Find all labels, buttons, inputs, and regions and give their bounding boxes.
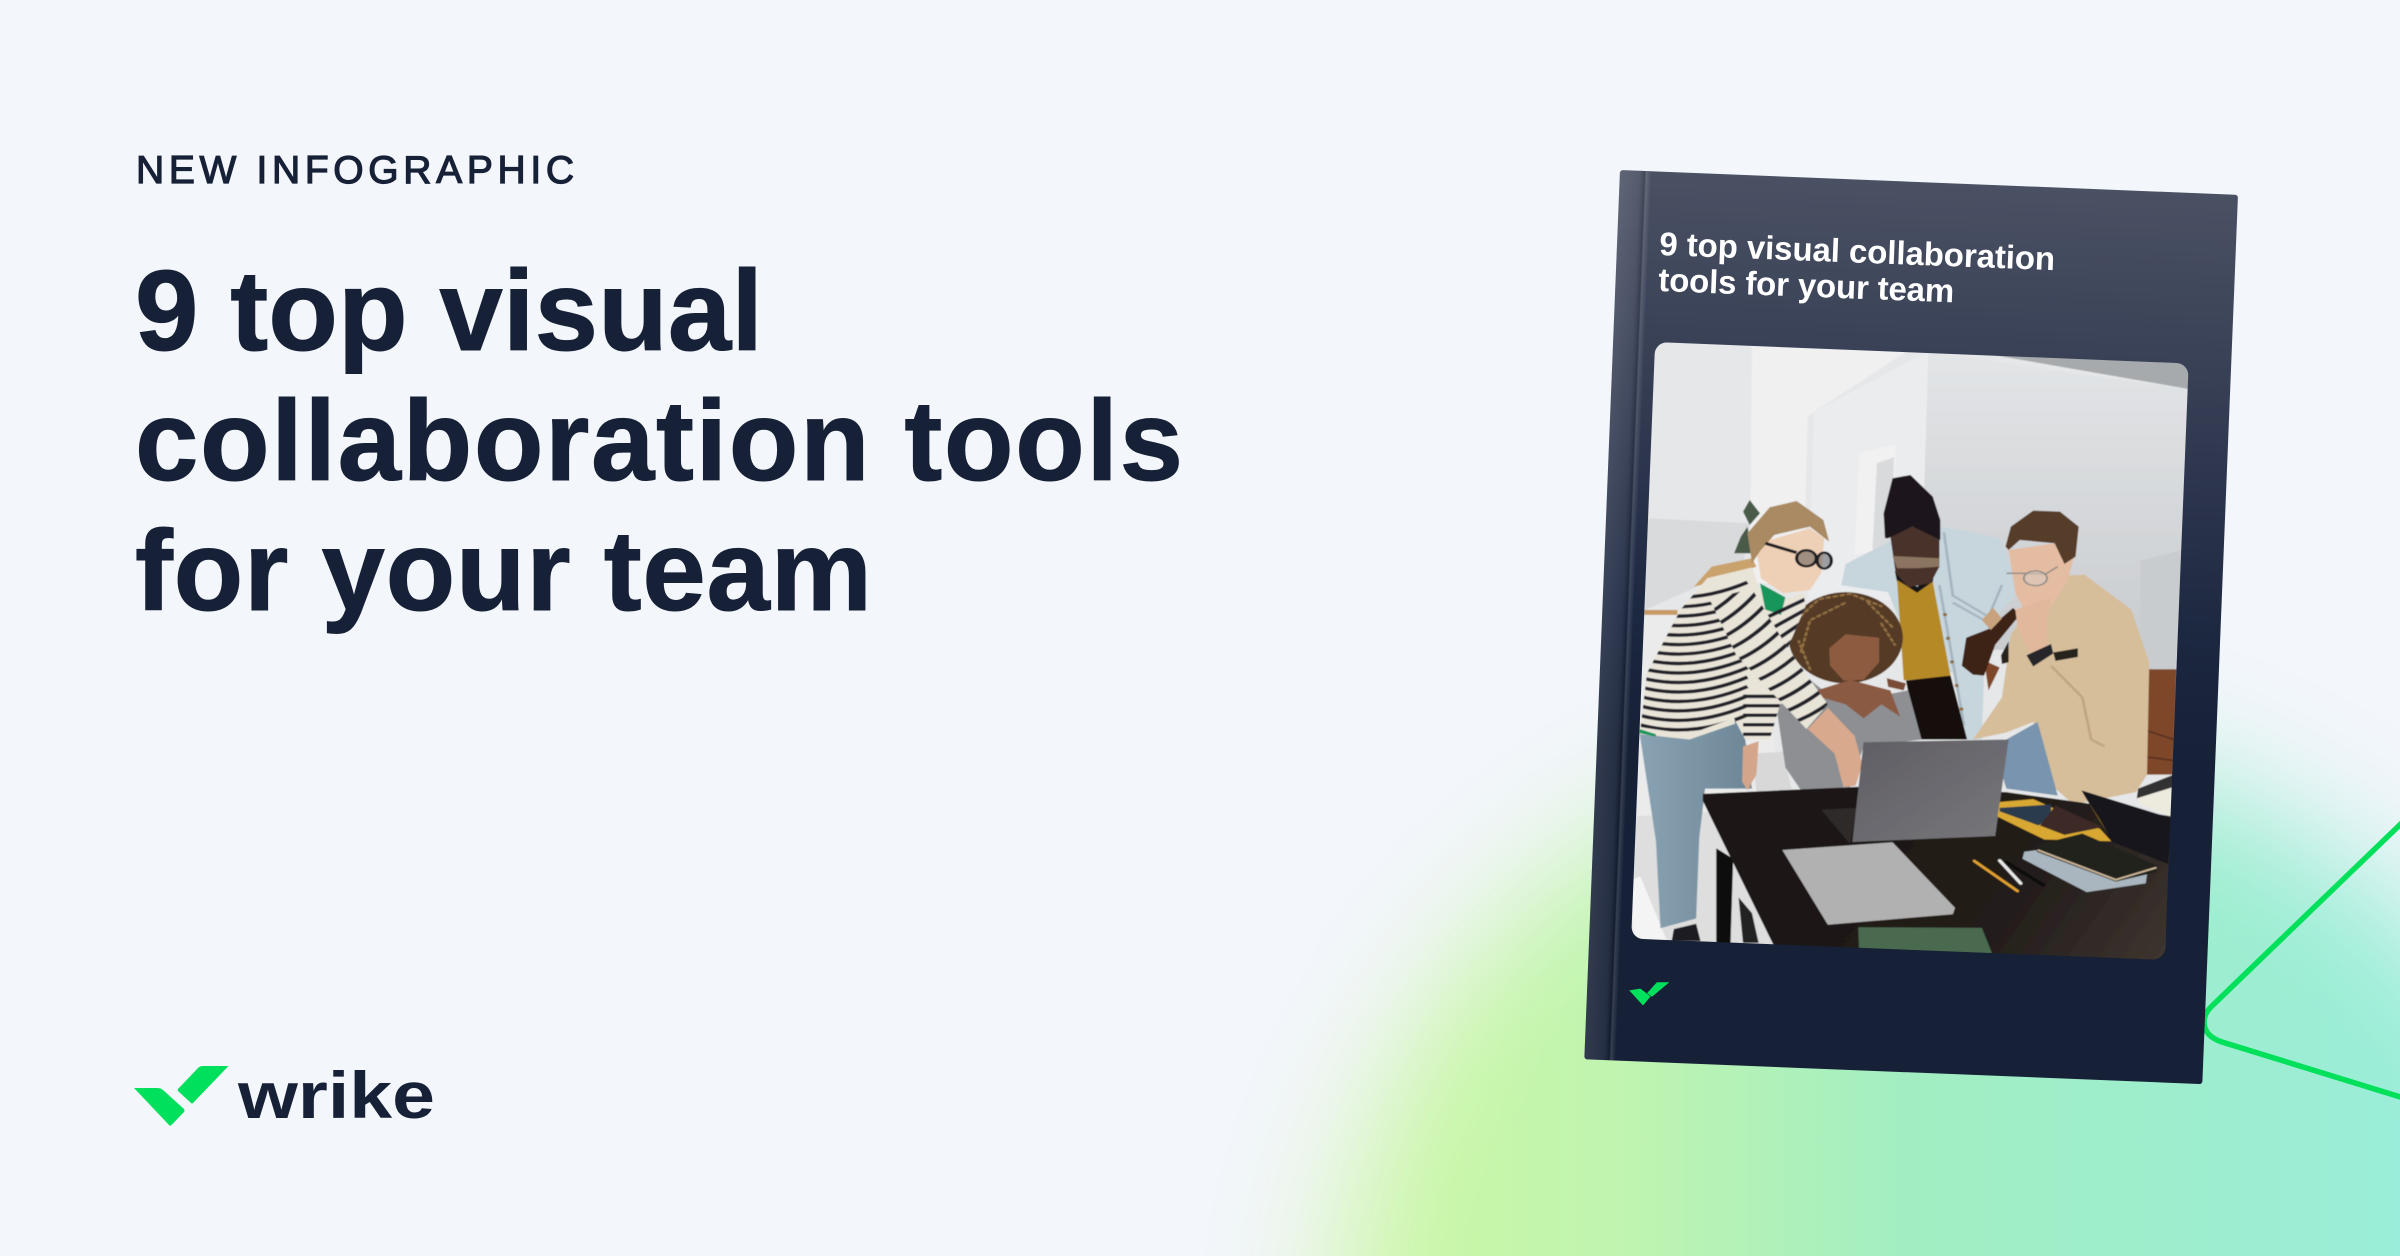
- icon: small wrike check on book: [1629, 982, 1669, 1005]
- book mockup: [1584, 170, 2238, 1084]
- wordmark: wrike: [237, 1058, 435, 1132]
- room walls: [1644, 340, 2194, 650]
- icon: dark laptop: [2138, 788, 2172, 818]
- icon: wrike check mark: [134, 1066, 228, 1126]
- person: man with glasses in tan jacket: [1973, 511, 2149, 804]
- person: woman with curly hair: [1752, 592, 1922, 792]
- icon: tablet and yellow papers: [1997, 799, 2111, 841]
- icon: closed laptop: [1782, 842, 1955, 925]
- floor and sofa: [1632, 614, 2177, 944]
- book spine: [1584, 170, 1651, 1061]
- background gradient blob: [1259, 711, 2400, 1256]
- headline line 3: for your team: [135, 508, 872, 635]
- eyebrow label: NEW INFOGRAPHIC: [136, 149, 574, 192]
- icon: notebook stack: [2022, 848, 2147, 892]
- icon: open laptop: [1821, 739, 2009, 844]
- icon: pencils: [1974, 861, 2043, 891]
- team photo: [1632, 342, 2188, 960]
- green outline shape: [2204, 815, 2400, 1100]
- book title line 1: 9 top visual collaboration: [1659, 225, 2056, 277]
- book title line 2: tools for your team: [1658, 261, 1955, 309]
- person: man with dreadlocks: [1841, 475, 2020, 739]
- book shadow: [1596, 184, 2253, 1100]
- book title: [1658, 225, 2056, 309]
- headline line 1: 9 top visual: [135, 248, 763, 375]
- person: woman in striped sweater: [1636, 501, 1862, 943]
- headline line 2: collaboration tools: [135, 378, 1183, 505]
- table with laptops and stationery: [1703, 739, 2174, 964]
- book cover: [1584, 170, 2238, 1084]
- headline: [135, 248, 1183, 635]
- icon: green notebook: [1858, 927, 1992, 954]
- wrike logo: [134, 1058, 435, 1132]
